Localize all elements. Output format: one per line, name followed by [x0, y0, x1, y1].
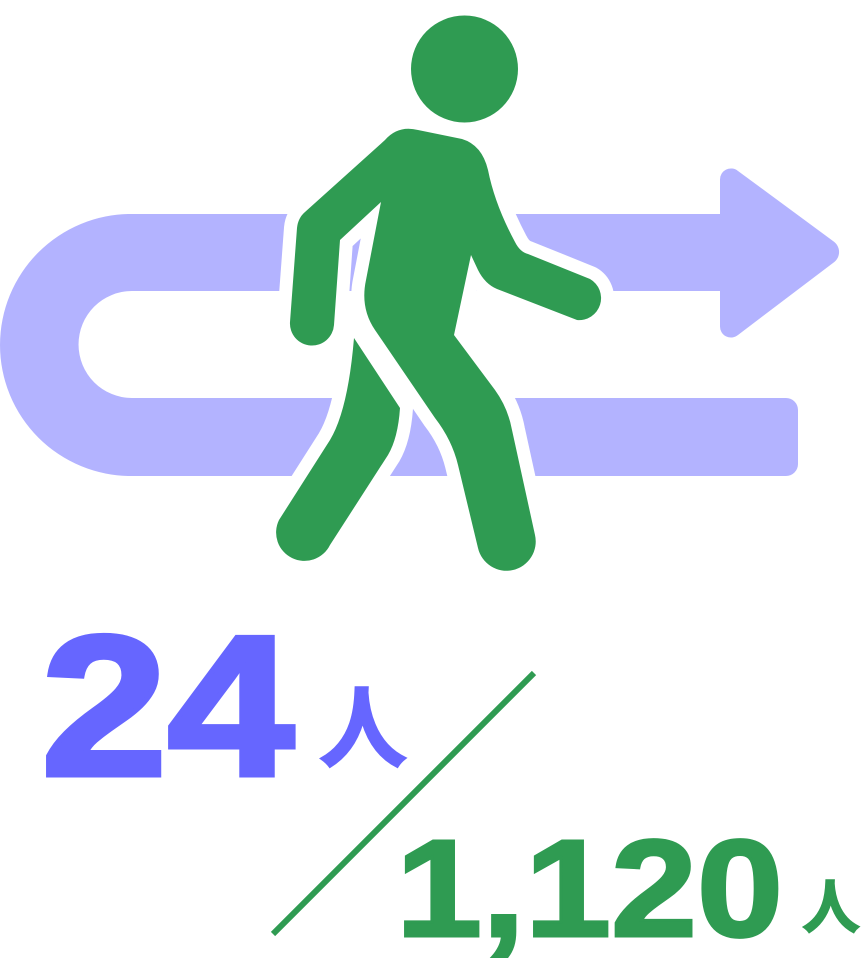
divider slash	[273, 673, 534, 934]
icon: walking person	[276, 16, 601, 571]
unit: person count blue: 人	[319, 680, 407, 779]
person body, arms and front leg	[290, 129, 601, 571]
person back leg	[276, 338, 400, 561]
unit: person count green: 人	[802, 876, 860, 941]
person head	[411, 16, 518, 122]
icon: U-turn arrow	[0, 168, 839, 476]
number: 24: 24	[41, 595, 294, 818]
